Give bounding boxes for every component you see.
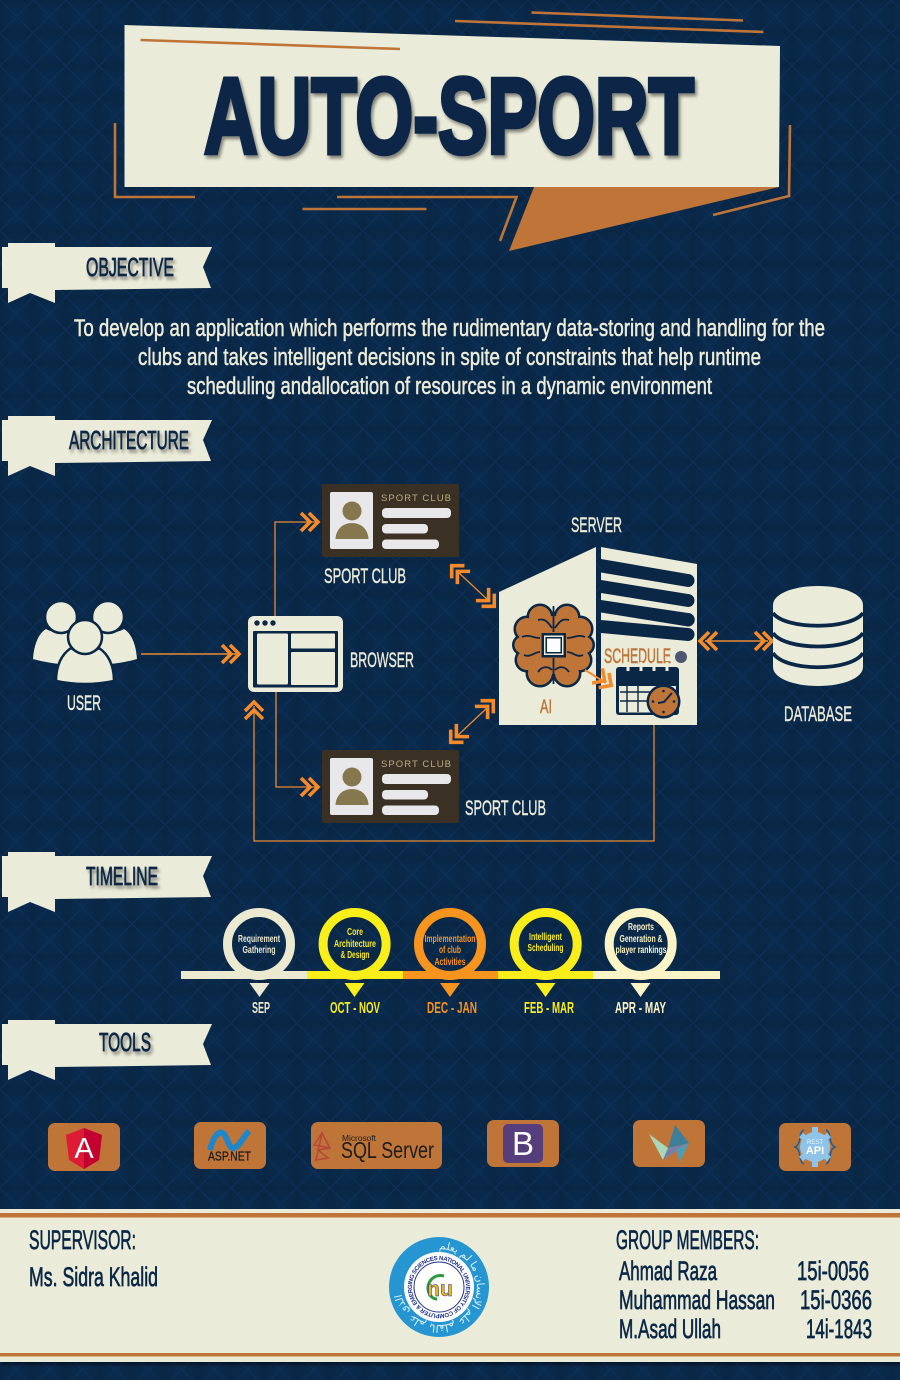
title banner [115,12,790,251]
heading: objective: OBJECTIVE [86,252,174,282]
university logo: NATIONAL UNIVERSITY OF COMPUTER & EMERGING SCIENCES [408,1256,470,1318]
date labels: APR - MAY [615,1000,666,1017]
title: AUTO-SPORT [204,55,694,176]
tool: asp.net [194,1122,266,1169]
milestone labels: Implementation [424,934,476,945]
label: user: USER [67,692,101,715]
arrow: ai to schedule [585,668,616,693]
indicator light [675,651,687,663]
tool: sql server: SQL Server [341,1137,434,1163]
objective text: scheduling andallocation of resources in a dynamic environment [187,373,712,400]
icon: sport club card top [322,484,459,557]
university logo: nu [427,1278,453,1301]
date labels: OCT - NOV [330,1000,380,1017]
objective text [74,315,825,400]
icon: database [773,586,863,686]
milestone labels: Intelligent [529,932,562,943]
date labels: SEP [252,1000,270,1017]
group members block: Ahmad Raza [619,1256,718,1286]
group members block [616,1225,872,1344]
icon: sport club card bottom: SPORT CLUB [381,759,451,770]
tool: sql server: Microsoft [342,1133,377,1143]
label: sport club bottom: SPORT CLUB [465,797,546,820]
label: schedule: SCHEDULE [604,645,671,668]
footer stripes [0,1213,900,1218]
ribbon: timeline [2,852,212,912]
section: timeline [2,852,720,1017]
ribbon: objective [2,243,212,303]
footer panel [0,1209,900,1366]
timeline rings [228,912,672,976]
tool: bootstrap: B [512,1125,534,1162]
ribbon: architecture [2,416,212,476]
timeline markers [250,983,650,997]
banner body [124,25,780,187]
group members block: M.Asad Ullah [619,1314,721,1344]
milestone labels [238,922,667,968]
supervisor block: Ms. Sidra Khalid [29,1262,158,1292]
label: sport club top: SPORT CLUB [324,565,406,588]
icon: sport club card bottom [322,750,459,823]
icon: browser [248,616,343,692]
tool: bootstrap [487,1120,559,1167]
tool: rest api [779,1123,851,1171]
icon: sport club card top: SPORT CLUB [381,493,451,504]
icon: server [499,547,697,725]
university logo: الذي علم بالقلم علم الإنسان ما لم يعلم [394,1242,485,1333]
label: database: DATABASE [784,703,852,726]
footer band [0,1209,900,1362]
milestone labels: Scheduling [528,943,564,954]
tool: rest api: API [806,1145,824,1157]
supervisor block: SUPERVISOR: [29,1225,136,1255]
milestone labels: Reports [628,922,654,933]
icon: users [33,601,137,684]
arrowheads [222,513,772,796]
decorative accent lines [115,12,790,241]
milestone labels: & Design [340,950,370,961]
date labels: FEB - MAR [524,1000,574,1017]
tool: angular [48,1123,120,1171]
heading: tools: TOOLS [99,1027,151,1057]
milestone labels: of club [439,945,461,956]
date labels [252,1000,666,1017]
section: architecture [2,416,863,841]
heading: timeline: TIMELINE [86,861,158,891]
supervisor block [29,1225,158,1292]
group members block: Muhammad Hassan [619,1285,775,1315]
milestone labels: Gathering [242,945,276,956]
milestone labels: Architecture [334,939,376,950]
heading: architecture: ARCHITECTURE [69,425,189,455]
section: objective [2,243,825,400]
milestone labels: Core [347,927,363,938]
icon: calendar with clock [616,662,680,718]
tool: prism [633,1120,705,1167]
tool: asp.net: ASP.NET [208,1150,251,1164]
section: tools [2,1020,851,1171]
banner tail [509,187,779,251]
timeline chart [181,912,720,1017]
milestone labels: player rankings [616,945,667,956]
milestone labels: Requirement [238,934,280,945]
ribbon: tools [2,1020,212,1080]
connectors [141,522,768,841]
tool: angular: A [74,1133,94,1165]
group members block: 15i-0056 [797,1256,869,1286]
label: ai: AI [540,697,552,718]
label: browser: BROWSER [350,649,414,672]
label: server: SERVER [571,514,622,537]
timeline bar [181,971,720,979]
date labels: DEC - JAN [427,1000,477,1017]
milestone labels: Activities [434,957,466,968]
tool: sql server [311,1122,442,1169]
milestone labels: Generation & [620,934,662,945]
group members block: GROUP MEMBERS: [616,1225,759,1255]
tool: rest api: REST [807,1140,823,1146]
icon: ai brain [514,606,592,685]
